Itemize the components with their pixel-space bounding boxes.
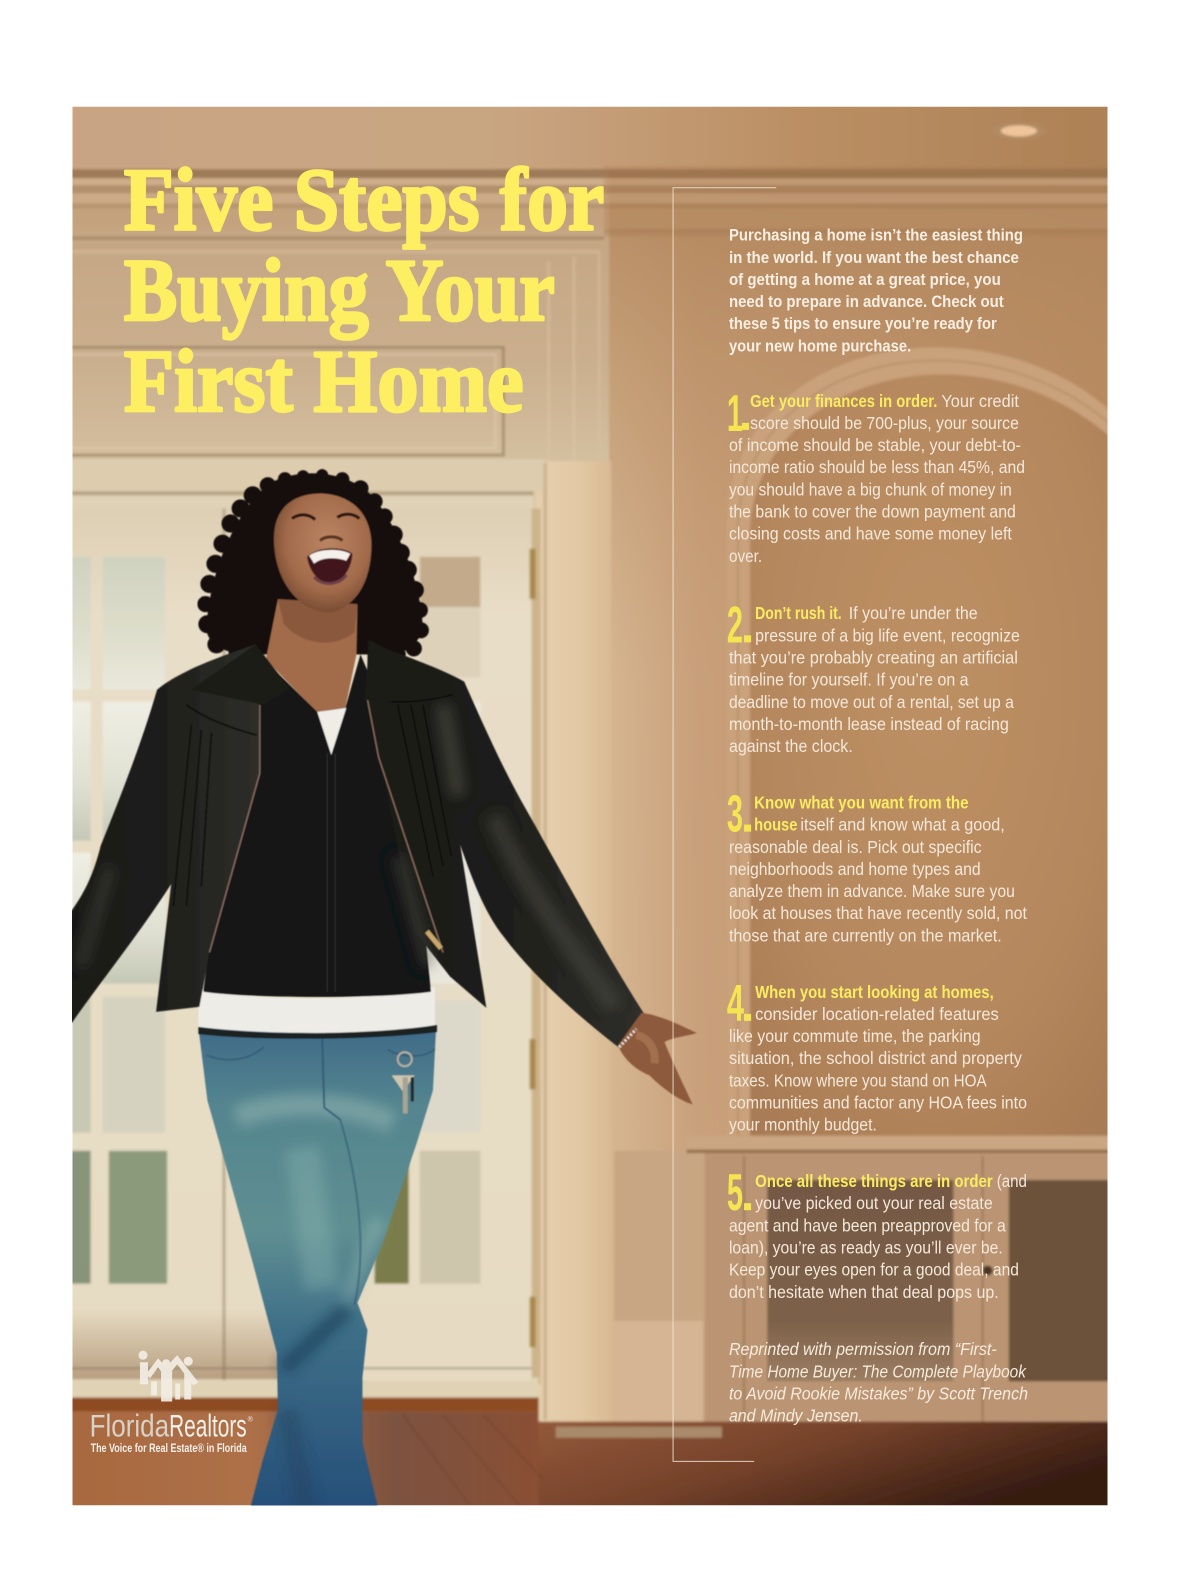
step 1: over. — [729, 547, 762, 566]
step 1: score should be 700-plus, your source — [750, 414, 1019, 433]
jeans — [198, 1027, 436, 1510]
tagline: The Voice for Real Estate® in Florida — [91, 1443, 247, 1455]
step 1: you should have a big chunk of money in — [729, 480, 1012, 499]
title — [124, 152, 604, 431]
reprint credit: to Avoid Rookie Mistakes” by Scott Trench — [729, 1384, 1028, 1403]
step 5: Once all these things are in order — [755, 1172, 993, 1191]
left upper wall — [60, 171, 609, 519]
hinges — [530, 549, 536, 1347]
white shirt — [198, 987, 435, 1033]
collars — [191, 640, 448, 705]
illustration: laughing woman — [60, 469, 697, 1510]
intro text: your new home purchase. — [729, 336, 911, 355]
number 1: 1 — [727, 385, 743, 443]
step 2: that you’re probably creating an artificial — [729, 648, 1018, 667]
intro text: Purchasing a home isn’t the easiest thing — [729, 226, 1023, 245]
reprint credit: Time Home Buyer: The Complete Playbook — [729, 1362, 1027, 1381]
ceiling — [72, 106, 1108, 172]
icon: house with figures — [138, 1351, 198, 1401]
number 3: 3 — [727, 786, 743, 844]
crown molding — [60, 166, 1118, 240]
step 2: timeline for yourself. If you’re on a — [729, 671, 969, 690]
reprint credit: Reprinted with permission from “First- — [729, 1340, 997, 1359]
door threshold and left floor — [60, 1377, 544, 1512]
intro text — [729, 226, 1023, 355]
step 1: the bank to cover the down payment and — [729, 503, 1016, 522]
left door panes — [60, 557, 167, 1284]
shade behind logo — [72, 1317, 278, 1380]
bracket frame around text column — [673, 188, 776, 1461]
intro text: in the world. If you want the best chance — [729, 248, 1019, 267]
step 3: itself and know what a good, — [800, 816, 1005, 835]
step 2: deadline to move out of a rental, set up a — [729, 693, 1014, 712]
step 4 — [727, 975, 1027, 1135]
step 3: neighborhoods and home types and — [729, 860, 981, 879]
step 2: month-to-month lease instead of racing — [729, 715, 1009, 734]
hair — [197, 469, 429, 662]
fleece top — [203, 654, 431, 997]
step 4: communities and factor any HOA fees into — [729, 1094, 1027, 1113]
reprint credit — [729, 1340, 1028, 1426]
right hand — [618, 1013, 697, 1104]
keys — [392, 1052, 415, 1114]
step 1: Get your finances in order. — [750, 392, 937, 411]
step 3: look at houses that have recently sold, not — [729, 904, 1027, 923]
step 1: income ratio should be less than 45%, and — [729, 458, 1025, 477]
step 1: of income should be stable, your debt-to- — [729, 436, 1021, 455]
step 4: situation, the school district and property — [729, 1049, 1022, 1068]
step 3 — [727, 786, 1027, 945]
open mouth — [307, 548, 352, 583]
step 5: Keep your eyes open for a good deal, and — [729, 1261, 1019, 1280]
step 5: you’ve picked out your real estate — [755, 1194, 993, 1213]
step 5: don’t hesitate when that deal pops up. — [729, 1283, 999, 1302]
step 5 — [727, 1164, 1027, 1302]
wordmark: Realtors — [169, 1409, 247, 1444]
title: First Home — [124, 333, 524, 431]
jacket left side and arm — [60, 644, 264, 1032]
step 2: Don’t rush it. — [755, 604, 842, 623]
infographic page — [72, 106, 1108, 1506]
neck and chest — [266, 599, 357, 713]
transom panel above the door — [72, 250, 600, 458]
step 1: Your credit — [941, 392, 1019, 411]
title: Buying Your — [124, 242, 555, 340]
floor vent — [556, 1427, 722, 1438]
step 5: loan), you’re as ready as you’ll ever be. — [729, 1238, 1003, 1257]
step 3: house — [754, 816, 797, 835]
wainscot and rail — [614, 1136, 1120, 1423]
intro text: these 5 tips to ensure you’re ready for — [729, 314, 997, 333]
jacket right side and arm — [367, 640, 645, 1050]
step 4: like your commute time, the parking — [729, 1027, 981, 1046]
step 2: against the clock. — [729, 737, 853, 756]
step 4: consider location-related features — [755, 1005, 999, 1024]
step 3: reasonable deal is. Pick out specific — [729, 838, 982, 857]
step 2 — [727, 596, 1020, 756]
title: Five Steps for — [124, 152, 604, 250]
step 3: analyze them in advance. Make sure you — [729, 882, 1015, 901]
step 3: those that are currently on the market. — [729, 926, 1002, 945]
leather highlights — [81, 705, 614, 1007]
step 4: your monthly budget. — [729, 1116, 877, 1135]
face — [274, 493, 372, 612]
number 2: 2 — [727, 596, 743, 654]
step 5: (and — [997, 1172, 1027, 1191]
number 5: 5 — [727, 1164, 743, 1222]
french doors — [60, 508, 536, 1380]
right wall — [594, 171, 1118, 1440]
baseboard — [612, 1321, 703, 1426]
step 1: closing costs and have some money left — [729, 525, 1012, 544]
wordmark: Florida — [90, 1409, 170, 1444]
step 2: If you’re under the — [849, 604, 978, 623]
step 3: Know what you want from the — [754, 793, 969, 812]
reprint credit: and Mindy Jensen. — [729, 1407, 863, 1426]
intro text: need to prepare in advance. Check out — [729, 292, 1004, 311]
wordmark: ® — [248, 1416, 254, 1424]
step 4: taxes. Know where you stand on HOA — [729, 1071, 987, 1090]
pilaster and door surround — [60, 459, 611, 1423]
denim folds — [237, 1105, 393, 1510]
step 5: agent and have been preapproved for a — [729, 1216, 1006, 1235]
logo: Florida Realtors — [90, 1351, 254, 1455]
right door panes — [375, 557, 480, 1284]
step 2: pressure of a big life event, recognize — [755, 626, 1020, 645]
step 1 — [727, 385, 1025, 566]
arched alcove — [727, 347, 1118, 1143]
intro text: of getting a home at a great price, you — [729, 270, 1001, 289]
wordmark — [90, 1409, 254, 1444]
number 4: 4 — [727, 975, 744, 1033]
recessed ceiling light — [999, 123, 1044, 139]
right floor — [534, 1422, 1118, 1512]
step 4: When you start looking at homes, — [755, 983, 994, 1002]
